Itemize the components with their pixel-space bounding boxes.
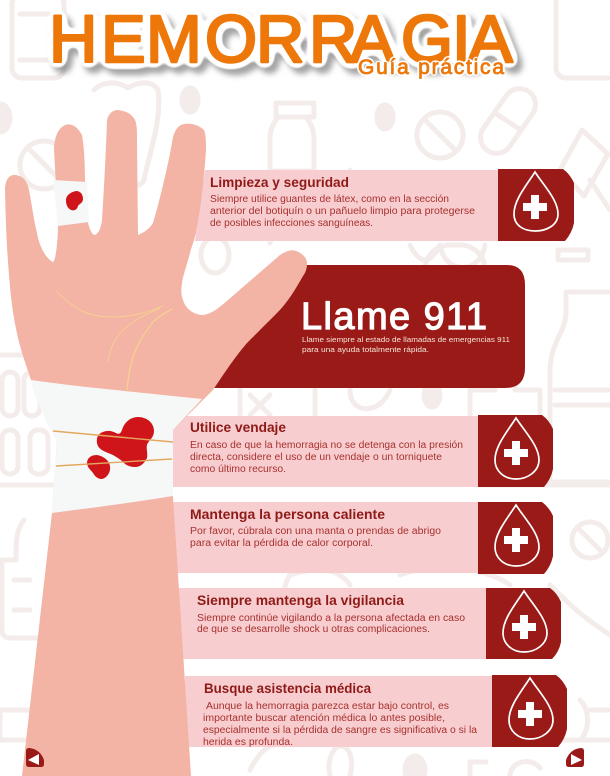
panel: Llame 911 xyxy=(213,265,525,388)
text block: herida es profunda. xyxy=(203,737,293,748)
wrist bandage xyxy=(31,380,202,513)
text block: En caso de que la hemorragia no se detenga con la presión xyxy=(190,440,463,451)
finger bandage xyxy=(53,180,89,226)
text: Llame body: Llame siempre al estado de llamadas de emergencias 911 xyxy=(302,335,510,344)
icon: blood drop with cross xyxy=(495,418,539,479)
heading: Llame 911: Llame 911 xyxy=(301,296,487,338)
icon: blood drop with cross xyxy=(514,172,558,231)
heading: Limpieza y seguridad xyxy=(210,174,349,190)
text block: importante buscar atención médica lo antes posible, xyxy=(203,713,445,724)
subtitle: Guía práctica xyxy=(358,56,504,79)
text block: como último recurso. xyxy=(190,464,286,475)
panel: Siempre mantenga la vigilancia xyxy=(178,588,561,659)
icon: blood drop with cross xyxy=(509,678,553,739)
text block: Siempre continúe vigilando a la persona afectada en caso xyxy=(197,613,465,624)
heading: Siempre mantenga la vigilancia xyxy=(197,592,404,608)
text: Llame body: para una ayuda totalmente rápida. xyxy=(302,345,429,354)
text: Llame body xyxy=(302,335,510,354)
palm lines xyxy=(56,290,172,390)
tourniquet strings xyxy=(53,431,173,466)
icon: previous arrow xyxy=(26,748,44,767)
text block xyxy=(197,613,465,635)
text block: directa, considere el uso de un vendaje o un torniquete xyxy=(190,452,442,463)
text block xyxy=(203,701,477,748)
text block xyxy=(190,440,463,475)
text block: Aunque la hemorragia parezca estar bajo control, es xyxy=(206,701,449,712)
title: HEMORRAGIA xyxy=(49,2,513,77)
text block: Siempre utilice guantes de látex, como en la sección xyxy=(210,194,449,205)
text block: especialmente si la pérdida de sangre es significativa o si la xyxy=(203,725,477,736)
hand and forearm xyxy=(5,110,307,776)
text block: Por favor, cúbrala con una manta o prendas de abrigo xyxy=(190,526,441,537)
text block xyxy=(210,194,475,229)
illustration: hand with bandages xyxy=(5,110,307,776)
heading: Mantenga la persona caliente xyxy=(190,506,385,522)
icon: blood drop with cross xyxy=(503,591,547,652)
icon: next arrow xyxy=(566,748,584,767)
text block xyxy=(190,526,441,549)
text block: para evitar la pérdida de calor corporal. xyxy=(190,538,373,549)
text block: anterior del botiquín o un pañuelo limpio para protegerse xyxy=(210,206,475,217)
heading: Busque asistencia médica xyxy=(204,680,371,696)
panel: Busque asistencia médica xyxy=(185,675,567,748)
text block: de que se desarrolle shock u otras complicaciones. xyxy=(197,624,430,635)
heading: Utilice vendaje xyxy=(190,419,286,435)
blood stain xyxy=(97,417,154,467)
panel: Utilice vendaje xyxy=(170,415,553,487)
icon: blood drop with cross xyxy=(495,505,539,566)
panel: Mantenga la persona caliente xyxy=(170,502,553,574)
finger blood xyxy=(66,191,83,210)
text block: de posibles infecciones sanguíneas. xyxy=(210,218,373,229)
panel: Limpieza y seguridad xyxy=(195,169,574,241)
